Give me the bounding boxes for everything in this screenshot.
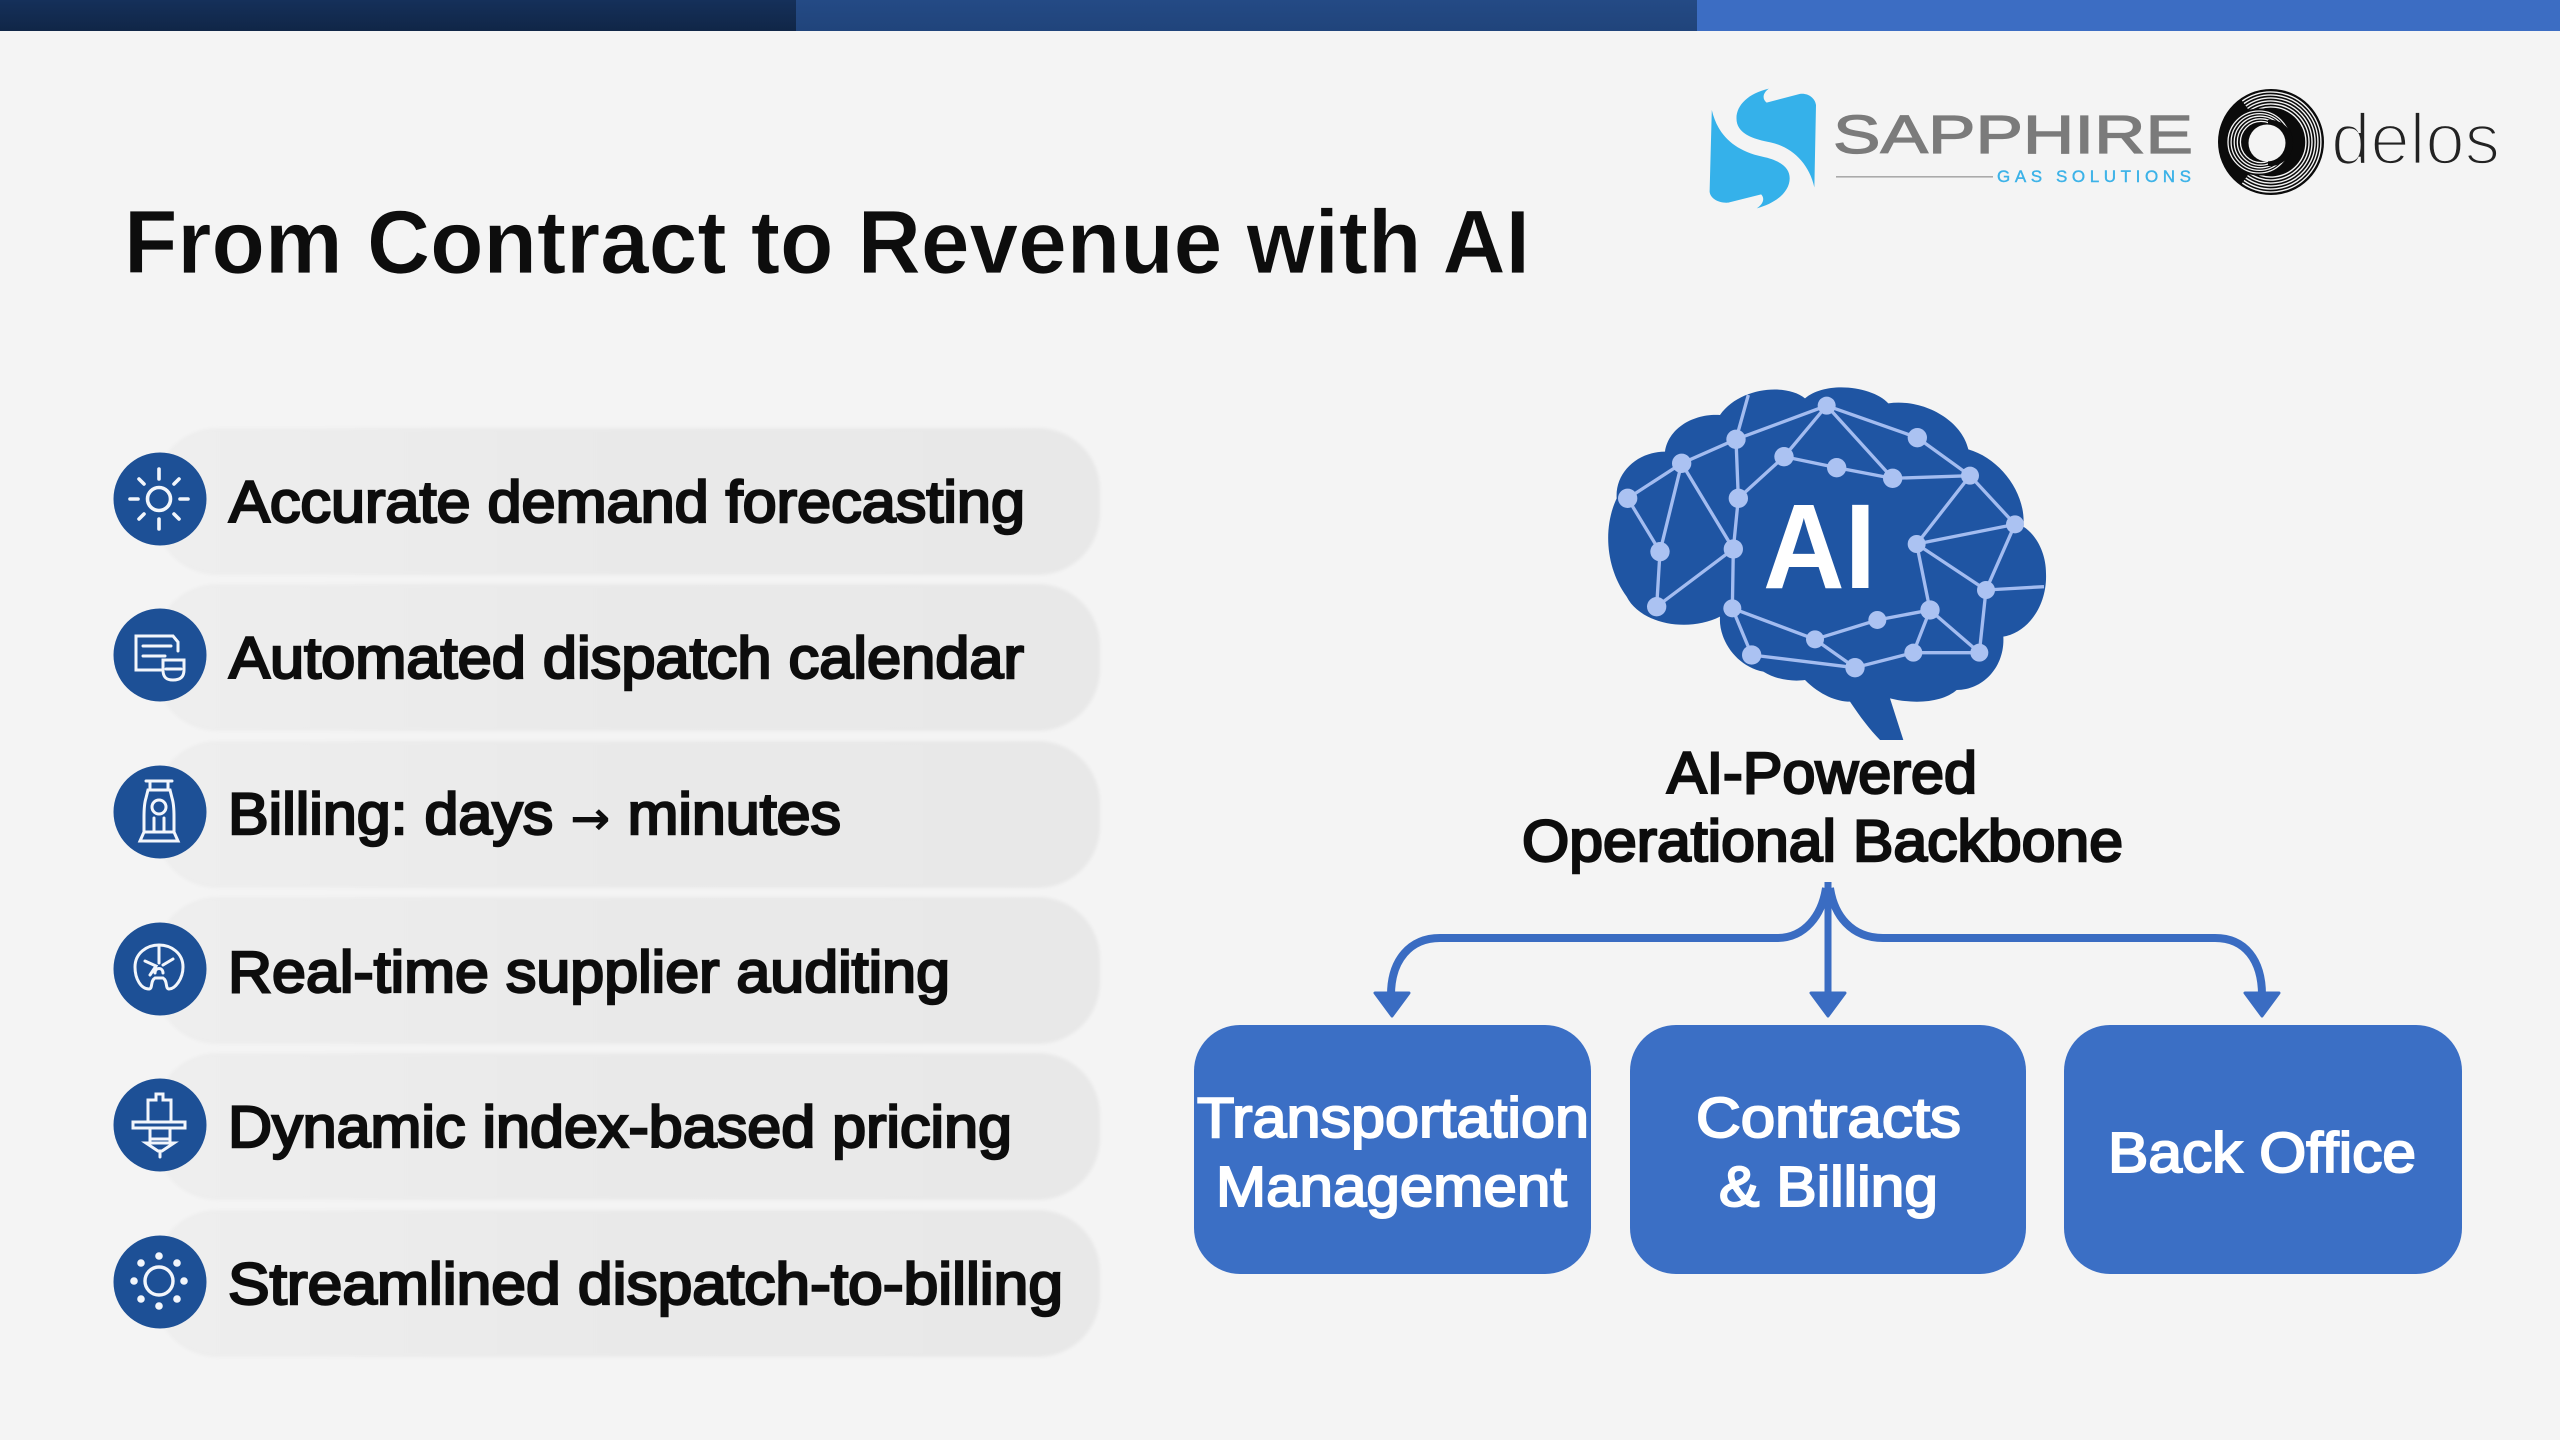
label: Dynamic index-based pricing	[228, 1095, 1012, 1160]
box: Back Office: Back Office	[2108, 1121, 2416, 1185]
list item: Dynamic index-based pricing	[114, 1053, 1100, 1200]
box: Back Office	[2064, 1025, 2462, 1274]
brain label: AI: AI	[1763, 478, 1876, 614]
heading: AI-Powered Operational Backbone: Operational Backbone	[1522, 809, 2123, 874]
icon: document with cup	[136, 636, 184, 680]
title: From Contract to Revenue with AI	[124, 193, 1530, 293]
list item: Accurate demand forecasting	[114, 428, 1100, 575]
box: Contracts & Billing: Contracts	[1696, 1086, 1961, 1150]
icon: sun	[130, 469, 188, 529]
list item: Real-time supplier auditing	[114, 897, 1100, 1044]
box: Contracts & Billing: & Billing	[1719, 1155, 1938, 1219]
logo: Sapphire Gas Solutions	[1710, 89, 2193, 208]
label: Automated dispatch calendar	[229, 626, 1024, 691]
list item: Automated dispatch calendar	[114, 584, 1100, 731]
heading: AI-Powered Operational Backbone: AI-Powered	[1667, 741, 1977, 806]
logo: delos	[2218, 89, 2500, 195]
label: Billing: days → minutes	[228, 782, 841, 847]
label: Real-time supplier auditing	[228, 940, 950, 1005]
box: Transportation Management	[1194, 1025, 1591, 1274]
top colour bar	[0, 0, 2560, 31]
label: Streamlined dispatch-to-billing	[228, 1252, 1063, 1317]
panel: benefits list	[114, 428, 1100, 1357]
heading: AI-Powered Operational Backbone	[1522, 741, 2123, 874]
tagline: GAS SOLUTIONS: GAS SOLUTIONS	[1997, 167, 2191, 186]
box: Contracts & Billing	[1630, 1025, 2026, 1274]
list item: Billing days to minutes	[114, 741, 1100, 888]
icon: AI brain network	[1608, 387, 2046, 740]
icon: delos concentric rings	[2218, 89, 2324, 195]
label: Accurate demand forecasting	[229, 470, 1025, 535]
icon: dotted sun	[130, 1252, 188, 1310]
icon: gas cylinder	[140, 781, 178, 841]
wordmark: delos: delos	[2331, 100, 2500, 180]
list item: Streamlined dispatch-to-billing	[114, 1210, 1100, 1357]
wordmark: SAPPHIRE: SAPPHIRE	[1833, 105, 2193, 165]
box: Transportation Management: Transportation	[1197, 1086, 1589, 1150]
arrows: branching to three modules	[1375, 882, 2279, 1016]
icon: Sapphire S mark	[1710, 89, 1816, 208]
icon: valve	[133, 1094, 185, 1157]
box: Transportation Management: Management	[1216, 1155, 1567, 1219]
icon: lungs emblem	[135, 945, 183, 989]
